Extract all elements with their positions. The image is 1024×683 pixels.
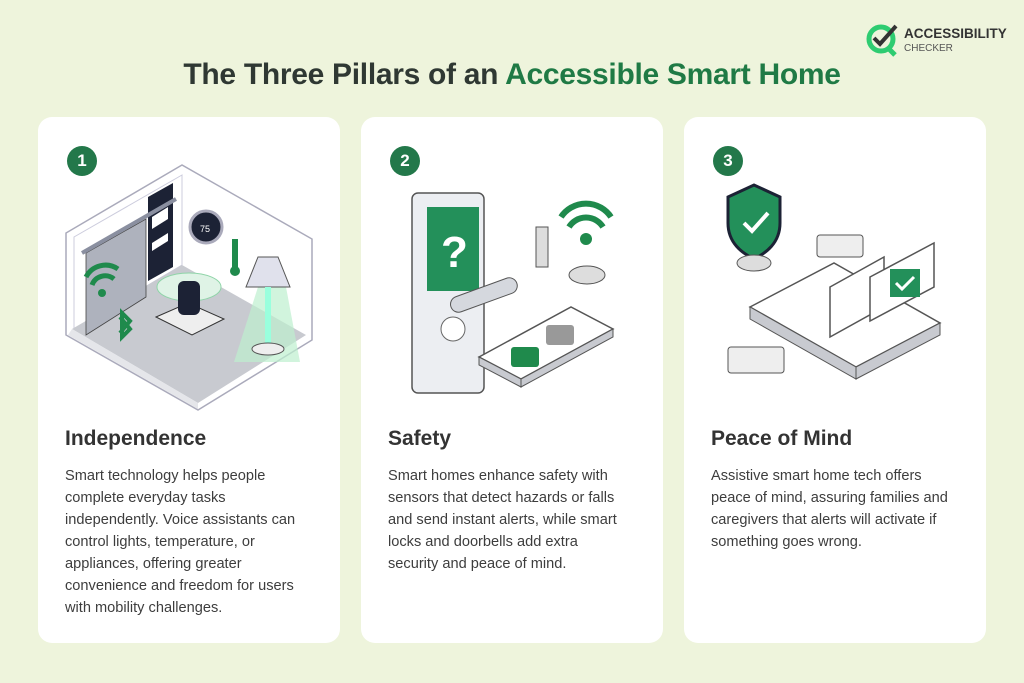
- body text: caregivers that alerts will activate if: [711, 512, 936, 528]
- body text: [65, 468, 295, 616]
- body text: Smart technology helps people: [65, 468, 265, 484]
- number badge 2: [390, 146, 420, 176]
- body text: [711, 468, 948, 550]
- logo: ACCESSIBILITY: [904, 26, 1007, 41]
- heading: Peace of Mind: [711, 427, 852, 450]
- illustration: smart lock and phone: [411, 192, 614, 394]
- body text: control lights, temperature, or: [65, 534, 255, 550]
- heading: Safety: [388, 427, 451, 450]
- body text: peace of mind, assuring families and: [711, 490, 948, 506]
- body text: [388, 468, 617, 572]
- body text: with mobility challenges.: [65, 600, 222, 616]
- body text: security and peace of mind.: [388, 556, 566, 572]
- illustration: smart lock and phone: ?: [441, 228, 468, 277]
- number badge 2: 2: [400, 151, 410, 170]
- logo: CHECKER: [904, 43, 953, 54]
- number badge 3: 3: [723, 151, 733, 170]
- number badge 1: [67, 146, 97, 176]
- logo: [866, 24, 1007, 57]
- panel: independence: [38, 117, 340, 643]
- body text: complete everyday tasks: [65, 490, 226, 506]
- panel: peace of mind: [684, 117, 986, 643]
- body text: Smart homes enhance safety with: [388, 468, 608, 484]
- body text: appliances, offering greater: [65, 556, 242, 572]
- title: The Three Pillars of an Accessible Smart Home: [183, 58, 841, 91]
- body text: something goes wrong.: [711, 534, 862, 550]
- body text: and send instant alerts, while smart: [388, 512, 617, 528]
- body text: locks and doorbells add extra: [388, 534, 578, 550]
- panel: safety: [361, 117, 663, 643]
- body text: sensors that detect hazards or falls: [388, 490, 614, 506]
- number badge 1: 1: [77, 151, 87, 170]
- illustration: phone with alerts: [726, 183, 942, 380]
- illustration: smart room: [65, 164, 313, 411]
- number badge 3: [713, 146, 743, 176]
- body text: convenience and freedom for users: [65, 578, 294, 594]
- body text: Assistive smart home tech offers: [711, 468, 922, 484]
- body text: independently. Voice assistants can: [65, 512, 295, 528]
- heading: Independence: [65, 427, 206, 450]
- illustration: smart room: 75: [200, 224, 210, 234]
